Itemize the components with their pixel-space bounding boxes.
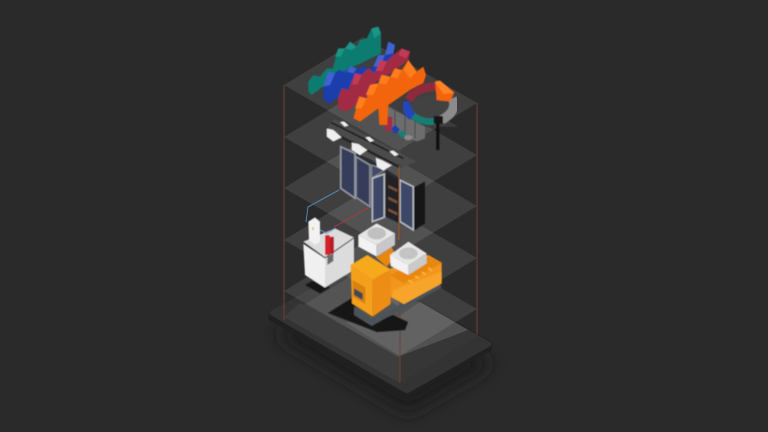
chip 3: [389, 151, 399, 156]
front cabinet top: [351, 255, 391, 280]
ring inner hole: [411, 96, 449, 119]
engine rear section: [376, 247, 397, 267]
tray rail: [331, 122, 403, 158]
blue arc: [406, 102, 412, 117]
crimson ridge chart: [338, 48, 410, 112]
white control cabinet: [303, 217, 354, 293]
red wire: [334, 208, 368, 227]
central rack: [386, 173, 400, 223]
red cylinder 2: [330, 237, 334, 254]
cabinet shadow: [305, 279, 330, 293]
gray arc: [442, 98, 454, 120]
translucent floor planes: [284, 37, 477, 357]
phone base: [272, 267, 489, 394]
phone drop shadow: [275, 290, 494, 414]
radiator rear unit: [358, 223, 395, 257]
phone screen: [284, 270, 477, 383]
teal main face: [333, 27, 381, 77]
rib row: [408, 268, 432, 283]
rear unit left: [358, 235, 377, 257]
cabinet left face: [303, 244, 325, 288]
plane 5: [284, 243, 477, 357]
orange ridge chart: [353, 60, 426, 125]
rear-mid door: [356, 157, 370, 207]
left frame line: [283, 85, 285, 320]
chip 2: [365, 137, 374, 142]
front cabinet right face: [373, 269, 391, 317]
teal arc: [412, 115, 434, 122]
cable and equipment platform: [327, 119, 417, 171]
rear-left door: [341, 147, 355, 198]
red cylinder 1: [325, 235, 330, 255]
teal ridge chart: [308, 27, 381, 95]
ridge charts: [308, 27, 426, 125]
mini crimson bar: [385, 117, 392, 131]
rack side panel: [414, 182, 425, 231]
blue pipes: [320, 228, 335, 233]
orange arc block: [435, 81, 454, 102]
white bracket 3: [376, 158, 392, 171]
rack body shadow: [341, 147, 414, 231]
orange wire: [398, 166, 400, 240]
front unit left: [390, 255, 408, 275]
gray control panel: [327, 253, 333, 265]
screen highlight facet: [345, 302, 468, 356]
tall electrical box: [308, 217, 320, 245]
orange arc highlight: [435, 81, 454, 94]
screen left facet: [284, 303, 400, 383]
engine lower band: [392, 272, 442, 304]
vertical frame lines: [284, 85, 477, 382]
LED strip top: [388, 185, 397, 192]
plane 3: [284, 140, 477, 254]
chip 1: [340, 121, 349, 127]
plane 2: [284, 89, 477, 203]
right frame line: [476, 103, 478, 335]
tray: [328, 119, 417, 168]
LED strip middle: [388, 197, 397, 204]
steel base: [354, 283, 442, 326]
strip of server modules: [385, 97, 458, 150]
open door: [372, 174, 384, 222]
blue caps: [323, 42, 395, 87]
rear fan: [367, 227, 386, 239]
front unit top: [390, 242, 427, 265]
generator: [328, 223, 442, 332]
teal left lump: [308, 68, 333, 95]
radiator front unit: [390, 242, 427, 275]
orange face: [353, 60, 426, 125]
front frame line: [399, 151, 401, 382]
phone face: [272, 267, 489, 391]
plane 4: [284, 192, 477, 306]
front fan: [399, 247, 418, 259]
engine block: [387, 255, 442, 304]
front unit right: [408, 253, 427, 275]
black node: [434, 116, 443, 124]
inner glass panel: [372, 165, 385, 178]
warning mark: [312, 227, 314, 230]
front cabinet left face: [351, 265, 373, 317]
engine top shade: [390, 257, 442, 283]
phone body: [272, 268, 489, 394]
orange highlights: [355, 60, 417, 108]
rear unit right: [377, 233, 395, 257]
rack LEDs: [388, 185, 397, 215]
blue face: [323, 42, 395, 103]
mini gray dome: [404, 135, 413, 140]
panel screen: [354, 288, 363, 300]
cabinet right face: [325, 238, 354, 288]
floor shadow: [328, 298, 408, 332]
mini teal bar: [398, 130, 407, 138]
module dividers: [395, 111, 415, 138]
mini blue bar: [391, 125, 400, 134]
crimson face: [338, 48, 410, 112]
engine ribs: [408, 268, 432, 283]
blue ridge chart: [323, 42, 395, 103]
crimson arc: [408, 87, 437, 100]
front door: [400, 180, 413, 230]
connecting wires: [306, 166, 399, 240]
module strip top: [387, 97, 458, 127]
server racks: [341, 147, 425, 231]
screen right facet: [400, 330, 477, 383]
teal caps: [335, 27, 381, 57]
cabinet top: [303, 228, 354, 257]
white bracket 2: [352, 143, 367, 155]
blue wire: [306, 190, 339, 222]
rear unit top: [358, 223, 395, 245]
front panel: [353, 280, 365, 304]
white bracket 1: [327, 128, 342, 142]
plane 1: [284, 37, 477, 151]
ring chart: [406, 81, 454, 124]
LED strip bottom: [388, 208, 397, 215]
crimson caps: [352, 48, 410, 84]
black support pole: [436, 120, 439, 150]
module strip face: [387, 106, 425, 142]
tray underside: [329, 131, 400, 167]
